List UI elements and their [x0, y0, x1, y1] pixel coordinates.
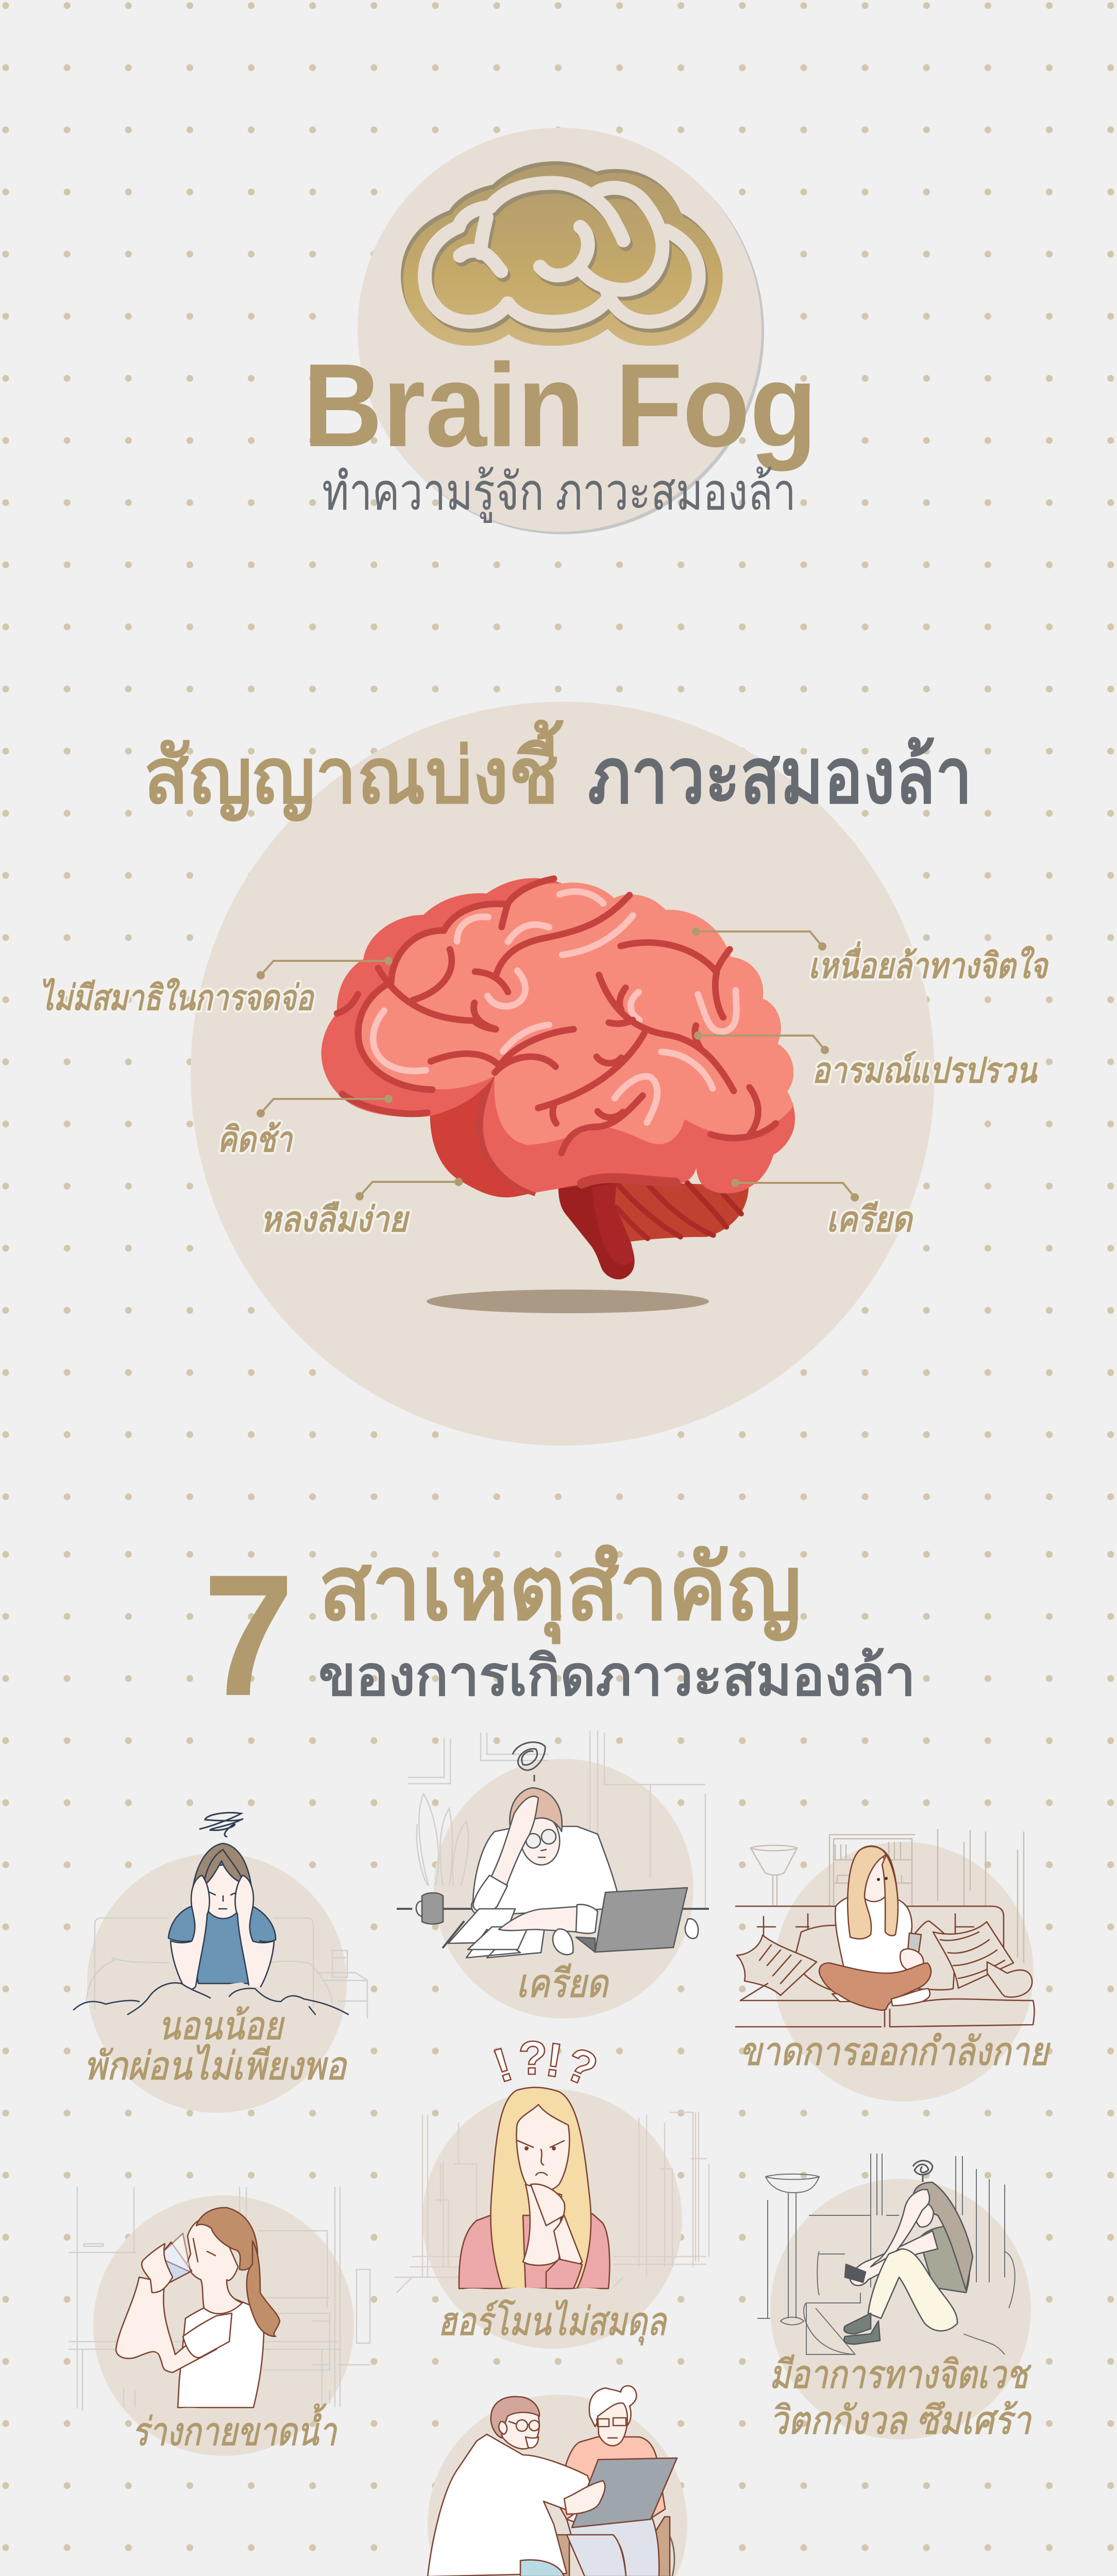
callout: slow thinking: [217, 1095, 393, 1159]
callout: moody: อารมณ์แปรปรวน: [812, 1051, 1038, 1090]
illustration: doctor and patient: [428, 2386, 677, 2576]
callout: mentally tired: [692, 927, 1050, 986]
icon: exclamation and question marks: [487, 2032, 604, 2097]
cause: dehydration: [69, 2187, 371, 2456]
illustration: thinking woman: [394, 2088, 709, 2294]
callout: mentally tired: เหนื่อยล้าทางจิตใจ: [808, 941, 1050, 986]
panel circle: [191, 702, 935, 1446]
callout: forgetful: หลงลืมง่าย: [260, 1200, 410, 1239]
icon: scribble: [913, 2161, 933, 2182]
callout: forgetful: [260, 1178, 463, 1239]
heading line 2: ของการเกิดภาวะสมองล้า: [318, 1645, 916, 1707]
callout: slow thinking: คิดช้า: [217, 1120, 293, 1159]
label: นอนน้อย: [158, 2004, 285, 2048]
label: ฮอร์โมนไม่สมดุล: [438, 2299, 668, 2345]
illustration: woman on sofa: [736, 1829, 1035, 2027]
callout: stress: [731, 1179, 913, 1239]
title circle: [358, 128, 764, 534]
cause: mental health: [757, 2154, 1032, 2443]
panel: 7 causes: [69, 1538, 1051, 2576]
callout: stress: เครียด: [826, 1200, 913, 1239]
cause: stress: [397, 1731, 709, 2019]
panel: title: [303, 128, 817, 534]
label: เครียด: [516, 1962, 610, 2006]
callout: lack of focus: [39, 957, 393, 1018]
subtitle: ทำความรู้จัก ภาวะสมองล้า: [322, 463, 796, 523]
illustration: man at laptop: [397, 1731, 709, 1958]
icon: exclamation and question marks: ?: [558, 2037, 604, 2097]
label: ร่างกายขาดน้ำ: [132, 2403, 337, 2454]
icon: scribble: [513, 1742, 545, 1782]
cause: chronic disease: [428, 2386, 687, 2576]
heading number 7: 7: [203, 1539, 294, 1732]
icon: exclamation and question marks: ?: [518, 2032, 547, 2084]
panel: signs of brain fog: [39, 702, 1050, 1446]
icon: exclamation and question marks: !: [543, 2033, 566, 2088]
icon: brain cloud logo: [401, 161, 725, 350]
title: Brain Fog: Brain Fog: [303, 339, 817, 471]
illustration: brain: [321, 878, 795, 1279]
callout: moody: [694, 1031, 1038, 1090]
heading: signs: สัญญาณบ่งชี้: [144, 719, 564, 822]
cause: lack of exercise: [736, 1829, 1051, 2102]
label: มีอาการทางจิตเวช: [769, 2353, 1031, 2397]
label: ขาดการออกกำลังกาย: [739, 2030, 1051, 2074]
icon: exclamation and question marks: !: [487, 2038, 518, 2093]
cause: lack of sleep: [74, 1812, 367, 2113]
heading: brain fog: ภาวะสมองล้า: [588, 733, 972, 819]
heading line 1: สาเหตุสำคัญ: [318, 1538, 802, 1645]
illustration: woman holding head in bed: [74, 1843, 367, 2019]
icon: scribble over head: [200, 1812, 243, 1837]
label: วิตกกังวล ซึมเศร้า: [769, 2399, 1032, 2443]
label: พักผ่อนไม่เพียงพอ: [84, 2044, 348, 2088]
illustration: sad woman on couch: [757, 2154, 1015, 2354]
cause: hormonal imbalance: [394, 2032, 709, 2349]
shadow under brain: [427, 1290, 709, 1313]
illustration: woman drinking water: [69, 2187, 371, 2413]
callout: lack of focus: ไม่มีสมาธิในการจดจ่อ: [39, 977, 315, 1018]
